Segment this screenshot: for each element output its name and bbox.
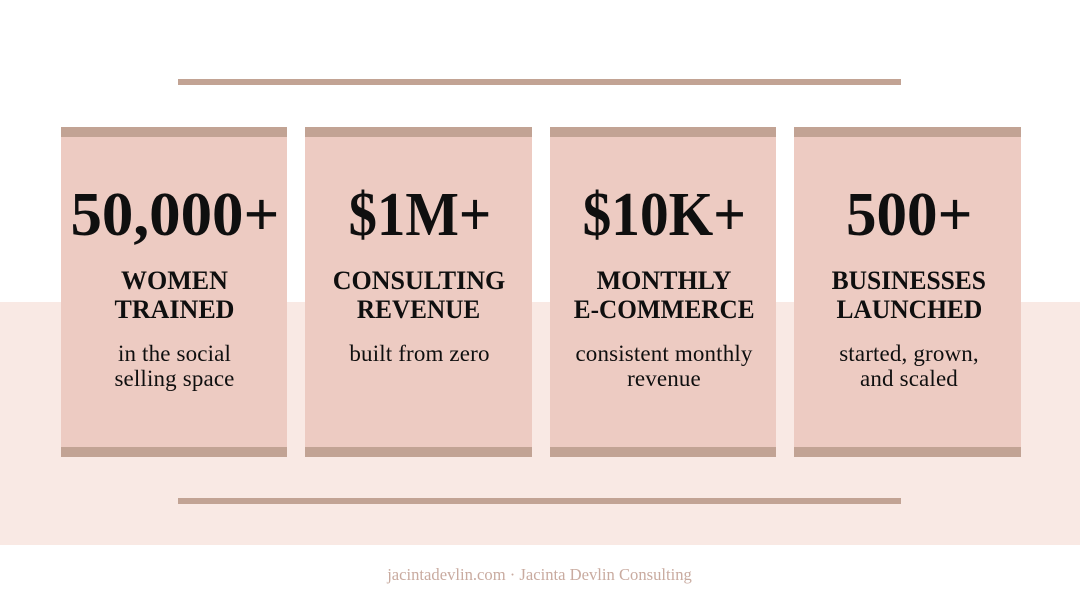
description: started, grown, scaled: and scaled [860,366,958,391]
bottom rule [178,498,901,504]
panel: women trained [61,127,287,457]
panel: monthly e-commerce [550,127,776,457]
stat: 500+: 500+ [846,181,973,249]
label: businesses launched: LAUNCHED [836,295,982,324]
label: consulting revenue: CONSULTING [333,266,505,295]
label: monthly e-commerce: E-COMMERCE [574,295,754,324]
stat: $10K+: $10K+ [582,181,746,249]
label: consulting revenue: REVENUE [357,295,481,324]
label: monthly e-commerce [574,266,754,324]
description: started, grown, scaled [839,341,979,391]
description: social selling: selling space [114,366,235,391]
footer credit: jacintadevlin.com · Jacinta Devlin Consulting [387,565,692,584]
stat: $1M+: $1M+ [348,181,491,249]
label: women trained [114,266,234,324]
description: social selling: in the social [118,341,231,366]
description: consistent monthly revenue: consistent monthly [575,341,753,366]
description: consistent monthly revenue [575,341,753,391]
background band [0,302,1080,545]
panel: businesses launched [794,127,1021,457]
label: consulting revenue [333,266,505,324]
description: consistent monthly revenue: revenue [627,366,701,391]
label: businesses launched: BUSINESSES [832,266,986,295]
label: women trained: TRAINED [115,295,234,324]
panel: consulting revenue [305,127,532,457]
description: social selling [114,341,235,391]
description: started, grown, scaled: started, grown, [839,341,979,366]
label: women trained: WOMEN [121,266,228,295]
stat: 50,000+: 50,000+ [70,181,279,249]
top rule [178,79,901,85]
label: monthly e-commerce: MONTHLY [597,266,731,295]
label: businesses launched [832,266,986,324]
description: built from zero: built from zero [349,341,490,366]
